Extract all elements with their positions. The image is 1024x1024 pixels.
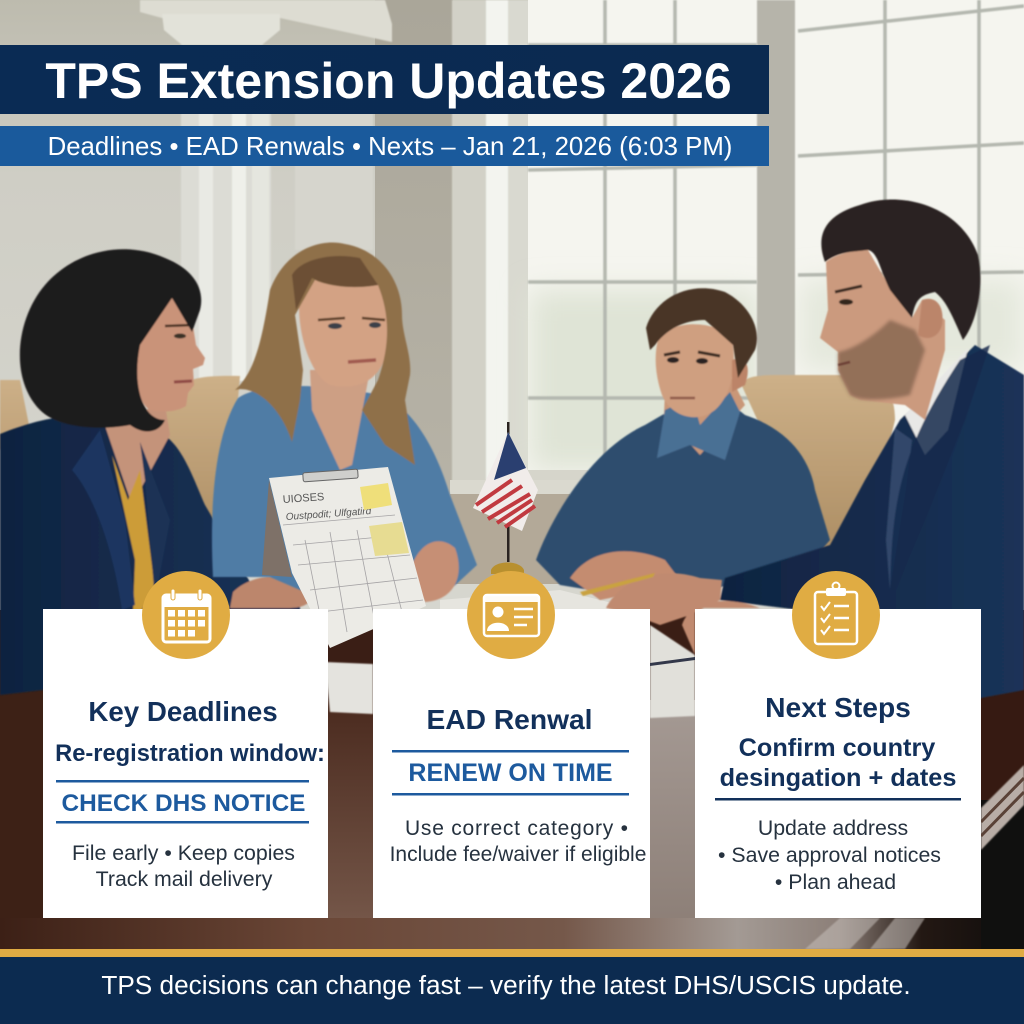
icon: ID card [467,571,555,659]
photo background: meeting room [0,0,1024,700]
details: Include fee/waiver if eligible [390,843,646,866]
panel: next steps [695,571,981,918]
face [135,291,205,411]
person: woman in blue blouse [212,243,477,602]
details [390,817,646,866]
subtitle text: Deadlines • EAD Renwals • Nexts – Jan 21, 2026 (6:03 PM) [48,133,732,161]
panel: key deadlines [43,571,328,918]
callout: RENEW ON TIME [408,759,613,787]
details: • Save approval notices [718,843,941,867]
heading: Next Steps [765,691,911,723]
window frame [452,0,530,490]
table papers [325,590,695,718]
cornice and columns [140,0,392,381]
details [72,841,295,891]
footer bar [0,949,1024,1024]
panel: EAD renewal [373,571,650,918]
subheading: desingation + dates [720,764,956,792]
table [0,610,1024,950]
icon: checklist [792,571,880,659]
person: man in navy suit [580,199,1024,700]
chairs [0,376,240,560]
person: boy in denim shirt [536,288,830,600]
subtitle bar [0,126,769,166]
icon: calendar [142,571,230,659]
title bar [0,45,769,114]
details: • Plan ahead [775,870,896,894]
callout: CHECK DHS NOTICE [62,790,305,817]
subheading [720,734,956,792]
subheading: Confirm country [739,734,935,762]
details: Use correct category • [405,817,628,840]
clipboard calendar: Oustpodit; Ulfgatird [285,506,372,523]
details [718,816,941,894]
details: Track mail delivery [96,867,273,891]
details: Update address [758,816,908,840]
heading: Key Deadlines [88,696,278,727]
details: File early • Keep copies [72,841,295,865]
heading: EAD Renwal [426,703,593,735]
footer text: TPS decisions can change fast – verify the latest DHS/USCIS update. [101,970,911,1000]
desk flag [473,422,538,574]
clipboard calendar [262,467,426,648]
head [820,250,945,420]
sill and lower wall [450,480,580,494]
clipboard calendar: UIOSES [282,491,325,506]
title text: TPS Extension Updates 2026 [45,53,732,109]
window panes and mullions [528,0,1024,488]
subheading: Re-registration window: [55,741,325,767]
person: woman in navy blazer [0,249,311,695]
